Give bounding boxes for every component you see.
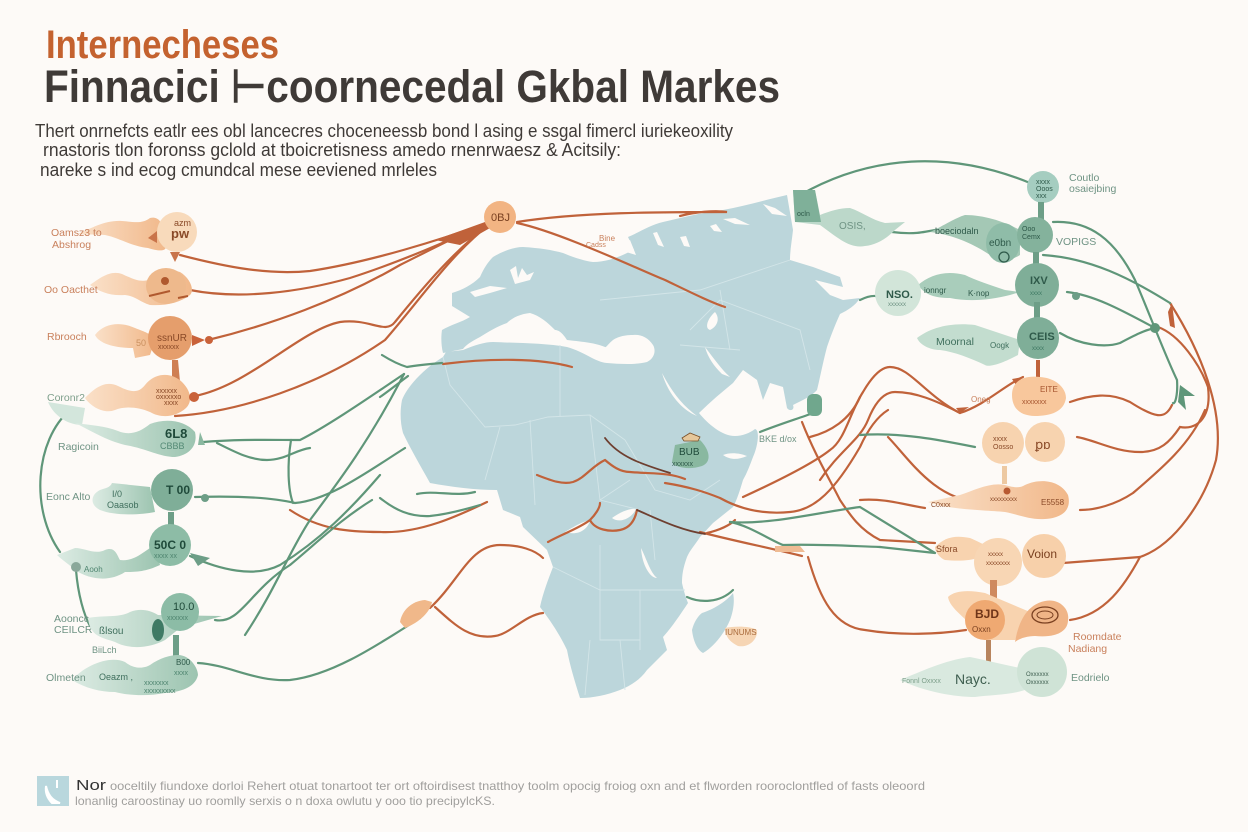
node: green 6: Oaasob <box>107 500 139 510</box>
hub: orange circle: 0BJ <box>491 212 510 224</box>
map: Madagascar <box>692 593 734 653</box>
node: green 4: xxxx <box>1032 346 1044 352</box>
node: green bottom: Oxxxxxx <box>1026 680 1049 686</box>
node: orange 3 <box>95 316 213 382</box>
node: green 2 <box>930 215 1053 266</box>
icon: note <box>37 776 69 806</box>
map: lakes and seas <box>470 204 787 578</box>
node: green top <box>1027 171 1059 222</box>
label: green 5: Ragicoin <box>58 441 99 453</box>
label: orange e <box>1068 631 1122 655</box>
node: green bottom: Fonnl Oxxxx <box>902 678 941 685</box>
node: orange b: ꝑɒ <box>1034 437 1050 452</box>
node: green top: Ooos <box>1036 186 1053 193</box>
map: country borders <box>443 260 810 695</box>
node: orange 1 <box>78 212 197 262</box>
node: orange 1: pw <box>171 226 190 241</box>
node: green 4: CEIS <box>1029 331 1055 343</box>
panel: right green nodes <box>875 171 1116 366</box>
label: orange 1: Oamsz3 to <box>51 227 102 239</box>
node: orange c <box>928 481 1069 519</box>
panel: right orange nodes <box>900 360 1122 697</box>
label: orange e: Roomdate <box>1073 631 1122 643</box>
node: orange e: BJD <box>975 607 999 621</box>
node: green bottom: Nayc. <box>955 671 991 687</box>
footer text: lonanlig caroostinay uo roomlly serxis o n doxa owlutu y ooo tio precipylcKS. <box>75 794 495 808</box>
connection lines: orange <box>175 211 1218 637</box>
node: orange c: xxxxxxxxx <box>990 497 1017 503</box>
node: green 3: ionngr <box>924 286 947 295</box>
label: green top <box>1069 172 1116 195</box>
node: green top: xxx <box>1036 193 1047 200</box>
panel: central nodes <box>400 190 905 646</box>
node: green 7: Aooh <box>84 565 103 574</box>
node: green 9: xxxx <box>174 670 188 677</box>
node: green 6 <box>92 469 209 532</box>
node: green 5: CBBB <box>160 441 185 451</box>
node: north green blob: OSIS, <box>839 221 866 232</box>
node: orange d <box>935 534 1066 602</box>
node: north green blob <box>793 190 905 246</box>
label: green 8: BiiLch <box>92 645 117 655</box>
node: orange d: xxxxxxxx <box>986 561 1010 567</box>
footer text <box>75 777 925 808</box>
node: green 2: Cemx <box>1022 234 1041 241</box>
node: green 9 <box>72 655 198 695</box>
label: orange 2: Oo Oacthet <box>44 284 98 296</box>
node: green 5: 6L8 <box>165 426 187 441</box>
label: green 6: Eonc Alto <box>46 491 91 503</box>
node: orange b <box>982 422 1065 484</box>
intro text block: nareke s ind ecog cmundcal mese eeviened mrleles <box>40 160 437 180</box>
dark connection lines over Africa <box>537 438 705 542</box>
title <box>44 23 780 112</box>
node: orange b: xxxx <box>993 436 1008 443</box>
world map <box>401 195 860 698</box>
intro text block: Thert onrnefcts eatlr ees obl lancecres choceneessb bond l asing e ssgal fimercl iuriekeoxility <box>35 121 733 141</box>
label: orange e: Nadiang <box>1068 643 1107 655</box>
node: green 2: e0bn <box>989 238 1011 249</box>
label: green 7a <box>54 613 93 636</box>
node: orange b: Oosso <box>993 444 1013 451</box>
node: orange e <box>948 591 1068 670</box>
label: orange 4: Coronr2 <box>47 392 85 404</box>
node: orange d: Voion <box>1027 547 1057 561</box>
label: orange 1 <box>51 227 102 251</box>
map: Eurasia and Africa <box>401 195 860 698</box>
label: green top: Coutlo <box>1069 172 1100 184</box>
label: green top: osaiejbing <box>1069 183 1116 195</box>
node: orange d: xxxxx <box>988 552 1003 558</box>
node: Africa green: xxxxxx <box>672 461 694 468</box>
node: green 8: 10.0 <box>173 601 194 613</box>
node: green 2: boeciodaln <box>935 226 979 236</box>
label: green bottom: Eodrielo <box>1071 672 1110 684</box>
connection lines: green <box>40 161 1195 680</box>
node: green bottom <box>900 647 1067 697</box>
node: green 3: K·nop <box>968 289 990 298</box>
node: junction <box>775 546 805 552</box>
node: orange 3: 50 <box>136 338 146 348</box>
node: green top: xxxx <box>1036 179 1050 186</box>
node: green 7: 50C 0 <box>154 538 186 552</box>
node: orange a: xxxxxxx <box>1022 399 1047 406</box>
node: orange a <box>1012 360 1066 416</box>
node: green bottom: Oxxxxxx <box>1026 672 1049 678</box>
node: green 8: ßlsou <box>99 626 123 637</box>
intro text block <box>35 121 733 180</box>
title: orange kicker: Internecheses <box>46 23 279 67</box>
title: main heading: Finnacici ⊢coornecedal Gkbal Markes <box>44 61 780 112</box>
node: green 4 <box>917 317 1059 366</box>
node: green 3: xxxx <box>1030 291 1042 297</box>
label: green 7a: CEILCR <box>54 624 93 636</box>
node: orange a: EITE <box>1040 385 1058 394</box>
node: orange e: Oxxn <box>972 625 991 634</box>
node: orange 1: azm <box>174 218 191 228</box>
node: Africa green: BUB <box>679 447 700 458</box>
label: orange 3: Rbrooch <box>47 331 87 343</box>
panel: left green nodes <box>46 402 222 695</box>
node: orange 3: ssnUR <box>157 333 187 344</box>
node: orange c: E5558 <box>1041 498 1065 507</box>
node: orange 2 <box>90 268 192 305</box>
node: green accent <box>48 402 85 425</box>
panel: left orange nodes <box>44 212 213 416</box>
node: green 3: NSO. <box>886 289 913 301</box>
node: green 9: B00 <box>176 658 191 667</box>
node: green 7 <box>57 524 210 579</box>
node: green 3: IXV <box>1030 275 1048 287</box>
label: green 9: Olmeten <box>46 672 86 684</box>
node: orange 4: xxxx <box>164 400 178 407</box>
node: orange 4 <box>85 375 199 416</box>
node: west Africa orange <box>400 600 432 628</box>
footer note <box>37 776 925 808</box>
label: orange a: Oneg <box>971 395 991 404</box>
label: map annotation: Cadss <box>586 242 606 249</box>
label: map annotation: Bine <box>599 234 616 243</box>
node: green 3: xxxxxx <box>888 302 906 308</box>
node: green 3 <box>875 263 1080 320</box>
label: green 2: VOPIGS <box>1056 236 1096 248</box>
node: green 4: Oogk <box>990 341 1010 350</box>
node: green 8 <box>88 593 222 657</box>
node: north green blob: ocln <box>797 211 810 218</box>
node: green 9: xxxxxxxxx <box>144 688 176 695</box>
hub: orange circle <box>435 201 516 245</box>
node: green 9: Oeazm , <box>99 672 133 682</box>
node: green 9: xxxxxxx <box>144 680 169 687</box>
node: green 7: xxxx xx <box>154 553 177 560</box>
intro text block: rnastoris tlon foronss gclold at tboicretisness amedo rnenrwaesz & Acitsily: <box>43 140 621 160</box>
node: Madagascar label <box>725 627 757 646</box>
label: orange 1: Abshrog <box>52 239 91 251</box>
node: orange 4: xxxxxx <box>156 388 178 395</box>
node: Madagascar label: IUNUMS <box>725 628 757 637</box>
node: green 8: xxxxxx <box>167 615 188 622</box>
node: orange c: C0xxx <box>931 502 951 509</box>
node: green 4: Moornal <box>936 336 974 348</box>
node: green 5 <box>75 421 205 457</box>
footer text: ooceltily fiundoxe dorloi Rehert otuat tonartoot ter ort oftoirdisest tnatthoy toolm opocig froiog oxn and et flworden rooroclontfled of fasts oleoord <box>110 779 925 793</box>
node: green 6: I/0 <box>112 489 122 499</box>
node: orange d: Sfora <box>936 544 958 554</box>
node: orange 3: xxxxxx <box>158 344 180 351</box>
footer text: Nor <box>76 777 106 794</box>
node: Africa green <box>672 433 709 468</box>
node: orange 4: oxxxxxo <box>156 394 181 401</box>
node: green 2: Ooo <box>1022 226 1035 233</box>
node: east Asia marker <box>807 394 822 416</box>
label: green 7a: Aooncc <box>54 613 89 625</box>
node: green 6: T 00 <box>166 483 190 497</box>
label: east Africa: BKE d/ox <box>759 434 797 444</box>
label: map annotation <box>586 234 616 249</box>
